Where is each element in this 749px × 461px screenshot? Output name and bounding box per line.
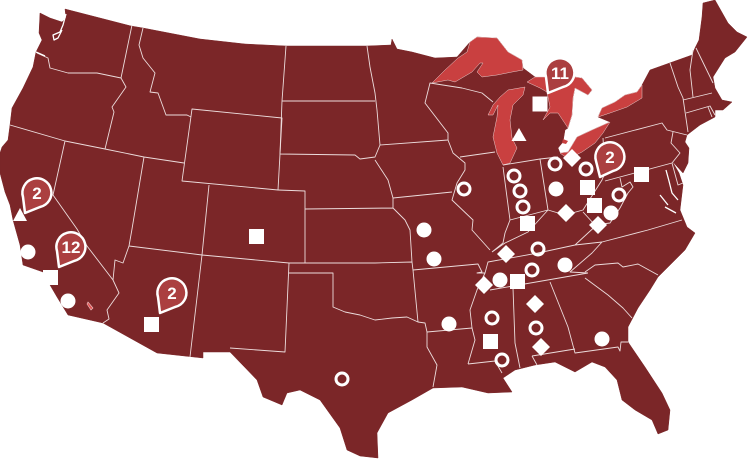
- lake huron: [527, 77, 592, 128]
- water slivers: bays and sounds: [36, 14, 706, 213]
- pin: 12 southern california: [56, 232, 85, 267]
- lake superior: [432, 37, 523, 83]
- markers: triangles: [13, 128, 526, 221]
- markers: diamonds: [475, 149, 607, 356]
- pin: 2 arizona: 2: [167, 284, 177, 303]
- pin: 2 northern california: [22, 178, 51, 213]
- pin: 2 ohio: [595, 142, 624, 177]
- pin: 2 ohio: 2: [605, 148, 615, 167]
- lake st clair: [562, 139, 568, 144]
- lake erie: [560, 122, 610, 157]
- lake michigan: [488, 87, 525, 165]
- pin: 11 michigan: 11: [551, 64, 569, 83]
- pin: 2 arizona: [157, 278, 186, 313]
- salton sea: [87, 302, 93, 310]
- pin: 11 michigan: [545, 58, 574, 93]
- lake ontario: [598, 85, 642, 117]
- state borders: [10, 25, 715, 387]
- markers: rings: [336, 158, 625, 385]
- pin: 2 northern california: 2: [32, 184, 42, 203]
- pin: 12 southern california: 12: [62, 238, 80, 257]
- markers: filled circles: [20, 182, 618, 346]
- markers: squares: [43, 96, 649, 349]
